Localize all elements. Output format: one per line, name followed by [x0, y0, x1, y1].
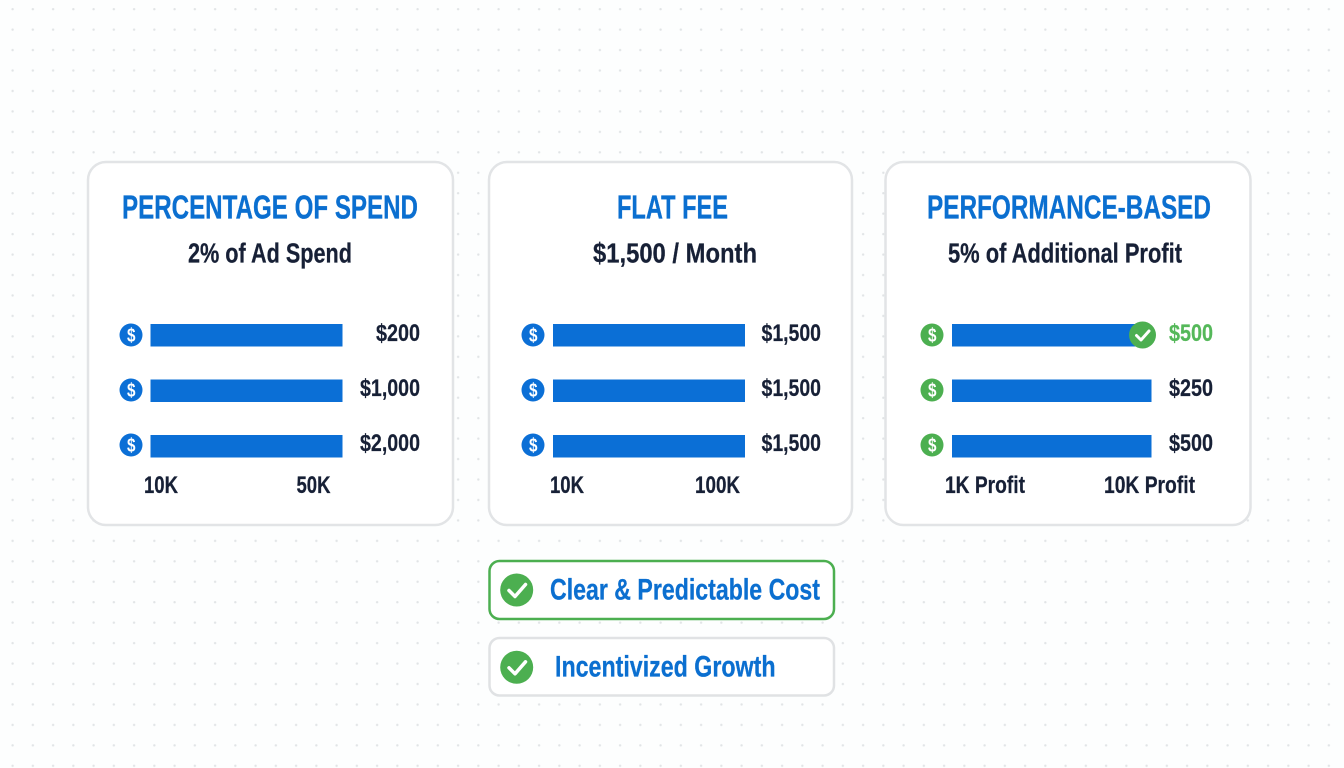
chart row: $500: $500 [1169, 430, 1213, 457]
chart row: third $1,500: $ [529, 436, 538, 456]
heading: percentage of spend: PERCENTAGE OF SPEND [122, 188, 418, 226]
callout: incentivized growth: Incentivized Growth [555, 651, 776, 684]
icon: check [500, 574, 533, 606]
chart row: $500 highlighted: $500 [1169, 320, 1213, 347]
chart row: $1,000: $1,000 [360, 375, 420, 402]
chart row: third $1,500: $1,500 [762, 430, 821, 457]
chart row: $500: $ [928, 436, 937, 456]
heading: performance-based: PERFORMANCE-BASED [927, 188, 1211, 226]
chart row: $500 [920, 430, 1213, 458]
icon: check on bar [1129, 322, 1156, 348]
chart row: $200: $ [127, 326, 136, 346]
axis label: 10K: 10K [144, 472, 179, 499]
subheading: $1,500 / month: $1,500 / Month [593, 238, 757, 268]
chart row: $500 highlighted: $ [928, 326, 937, 346]
chart row: first $1,500: $1,500 [762, 320, 821, 347]
chart row: first $1,500 [522, 320, 821, 347]
chart row: first $1,500: $ [529, 326, 538, 346]
subheading: 5% of additional profit: 5% of Additional Profit [948, 238, 1182, 268]
axis label: 100K: 100K [695, 472, 741, 499]
axis label: 10K: 10K [550, 472, 585, 499]
panel: flat fee [489, 162, 852, 525]
axis label: 1K profit: 1K Profit [945, 472, 1025, 499]
chart row: $250: $250 [1169, 375, 1213, 402]
chart row: $2,000: $ [127, 436, 136, 456]
callout: incentivized growth [490, 638, 834, 696]
chart row: second $1,500: $1,500 [762, 375, 821, 402]
chart row: $200 [120, 320, 420, 347]
axis label: 10K profit: 10K Profit [1104, 472, 1195, 499]
chart row: third $1,500 [522, 430, 821, 458]
chart row: second $1,500: $ [529, 380, 538, 402]
chart row: $2,000 [120, 430, 420, 458]
heading: flat fee: FLAT FEE [617, 188, 728, 226]
chart row: $250: $ [928, 380, 937, 402]
callout: clear and predictable cost: Clear & Predictable Cost [550, 574, 820, 606]
chart row: $250 [920, 375, 1213, 402]
panel: performance-based [886, 162, 1250, 525]
chart row: second $1,500 [522, 375, 821, 402]
callout: clear and predictable cost [490, 561, 834, 619]
chart row: $200: $200 [376, 320, 420, 347]
icon: check [500, 651, 533, 684]
axis label: 50K: 50K [296, 472, 331, 499]
chart row: $1,000 [120, 375, 420, 402]
chart row: $500 highlighted [920, 320, 1213, 348]
subheading: 2% of ad spend: 2% of Ad Spend [188, 238, 352, 268]
chart row: $2,000: $2,000 [360, 430, 420, 457]
chart row: $1,000: $ [127, 380, 136, 402]
panel: percentage of spend [88, 162, 453, 525]
